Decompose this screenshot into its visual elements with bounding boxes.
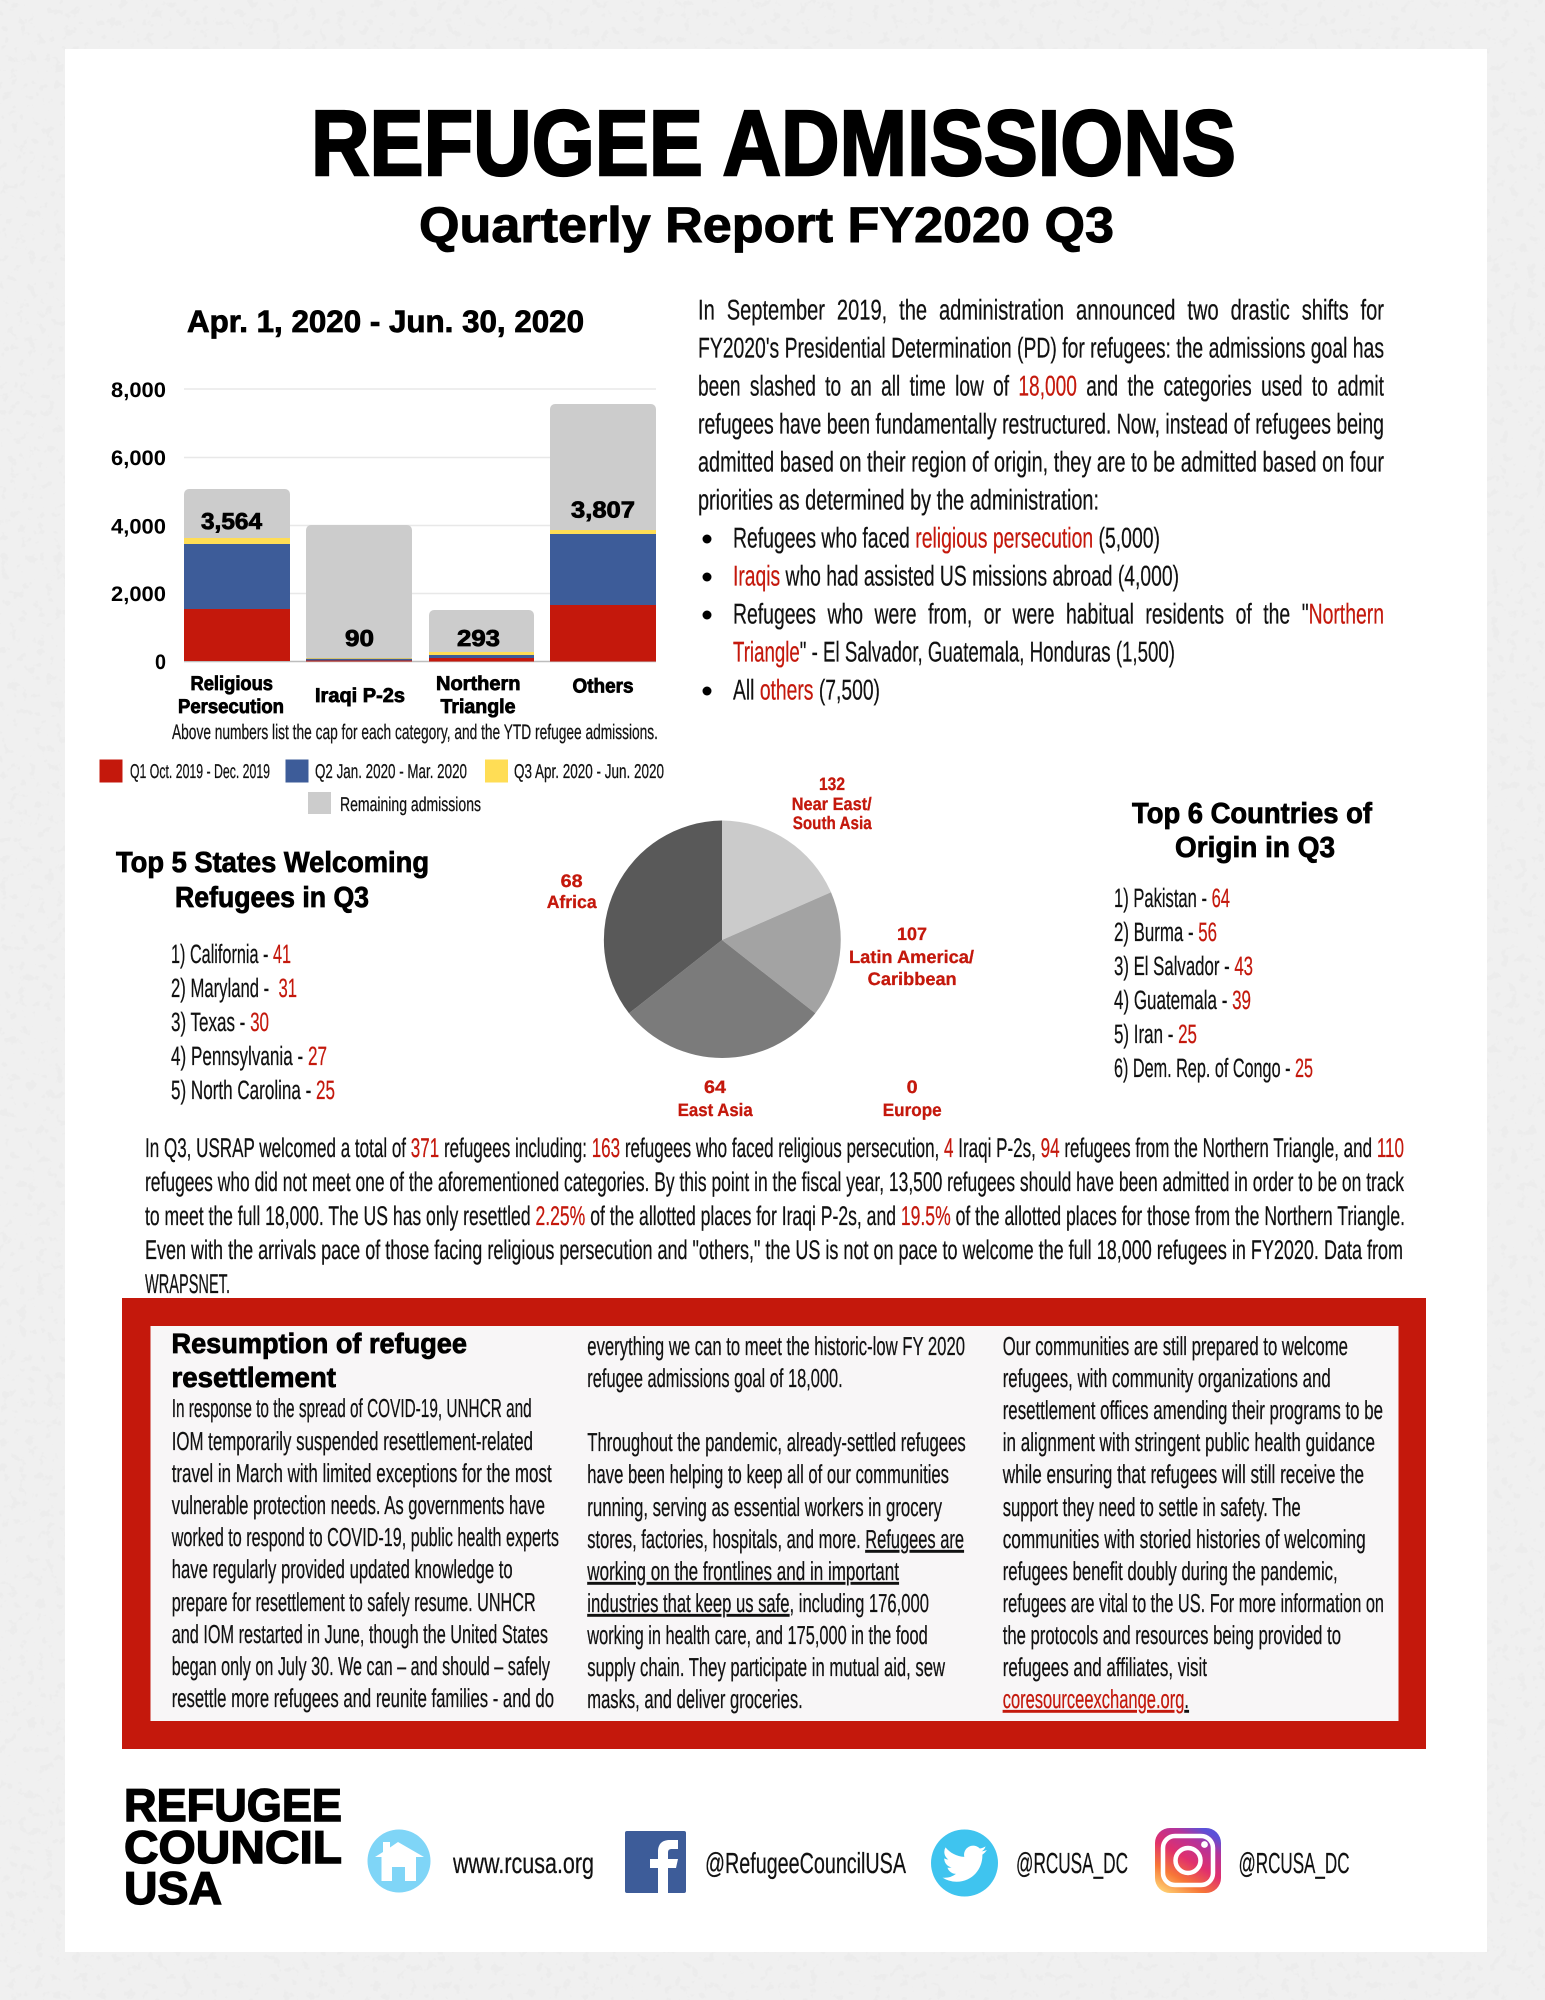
panel column 2: Throughout the pandemic, already-settled refugees — [587, 1427, 966, 1457]
intro text block: priorities as determined by the administration: — [698, 484, 1099, 516]
y axis labels — [111, 379, 166, 674]
bullet list of priorities — [702, 522, 1384, 706]
heading: top 6 countries: Top 6 Countries of — [1132, 798, 1372, 830]
x axis labels: Iraqi P-2s — [315, 685, 405, 707]
pie label: Near East/South Asia: 132 — [819, 774, 845, 794]
panel column 1: began only on July 30. We can – and should – safely — [172, 1651, 550, 1681]
heading: top 5 states: Refugees in Q3 — [175, 882, 369, 914]
panel column 1: have regularly provided updated knowledge to — [172, 1554, 513, 1584]
heading: top 6 countries — [1132, 798, 1372, 864]
chart heading: Apr. 1, 2020 - Jun. 30, 2020 — [187, 304, 584, 339]
pie label: Europe — [883, 1077, 942, 1120]
bullet list of priorities: All others (7,500) — [733, 674, 880, 706]
pie label: Near East/South Asia: South Asia — [793, 813, 873, 833]
icon: website home — [368, 1830, 430, 1892]
icon: instagram — [1155, 1828, 1221, 1893]
subtitle: Quarterly Report FY2020 Q3 — [419, 197, 1114, 253]
x axis labels: Northern — [436, 673, 520, 695]
twitter handle: @RCUSA_DC — [1016, 1848, 1128, 1880]
panel column 3: refugees, with community organizations and — [1003, 1363, 1331, 1393]
pie chart: arrivals by region — [547, 774, 974, 1120]
pie label: Africa: Africa — [547, 892, 598, 912]
intro text block: been slashed to an all time low of 18,000 and the categories used to admit — [698, 370, 1384, 402]
x axis labels: Persecution — [178, 696, 284, 718]
summary paragraph: In Q3, USRAP welcomed a total of 371 refugees including: 163 refugees who faced religious persecution, 4 Iraqi P-2s, 94 refugees from the Northern Triangle, and 110 — [145, 1133, 1404, 1163]
bar: Others — [550, 404, 656, 662]
panel column 2 — [587, 1331, 966, 1714]
y axis labels: 0 — [155, 651, 166, 674]
y axis labels: 8,000 — [111, 379, 166, 402]
website text: www.rcusa.org — [452, 1848, 594, 1880]
heading: top 6 countries: Origin in Q3 — [1175, 832, 1335, 864]
panel column 1: In response to the spread of COVID-19, UNHCR and — [172, 1393, 532, 1423]
facebook handle: @RefugeeCouncilUSA — [705, 1848, 906, 1880]
panel column 1 — [171, 1393, 559, 1713]
list: top 6 countries: 1) Pakistan - 64 — [1114, 883, 1230, 913]
panel column 2: masks, and deliver groceries. — [587, 1684, 803, 1714]
pie label: Latin America/Caribbean: 107 — [897, 924, 927, 944]
panel column 1: travel in March with limited exceptions for the most — [172, 1458, 552, 1488]
panel column 1: prepare for resettlement to safely resume. UNHCR — [172, 1587, 536, 1617]
list: top 6 countries: 5) Iran - 25 — [1114, 1019, 1197, 1049]
list: top 5 states: 3) Texas - 30 — [171, 1007, 269, 1037]
panel column 2: working in health care, and 175,000 in the food — [587, 1620, 928, 1650]
x axis labels: Religious — [190, 673, 273, 695]
title: REFUGEE ADMISSIONS — [311, 91, 1236, 195]
panel column 3: refugees benefit doubly during the pandemic, — [1003, 1556, 1338, 1586]
icon: facebook — [625, 1831, 686, 1893]
instagram handle: @RCUSA_DC — [1238, 1848, 1350, 1880]
chart legend: Q2 Jan. 2020 - Mar. 2020 — [315, 761, 467, 783]
panel heading — [172, 1328, 467, 1393]
pie label: Near East/South Asia: Near East/ — [792, 794, 872, 814]
summary paragraph: WRAPSNET. — [145, 1269, 230, 1299]
panel column 2: industries that keep us safe, including 176,000 — [587, 1588, 929, 1618]
bar: Iraqi P-2s — [306, 525, 412, 662]
pie label: East Asia: 64 — [704, 1077, 726, 1097]
bar: Iraqi P-2s: 90 — [345, 625, 374, 651]
panel column 2: have been helping to keep all of our communities — [587, 1459, 949, 1489]
panel column 3: support they need to settle in safety. The — [1003, 1492, 1301, 1522]
panel column 1: resettle more refugees and reunite families - and do — [172, 1683, 554, 1713]
pie label: Near East/South Asia — [792, 774, 873, 833]
list: top 6 countries — [1114, 883, 1313, 1083]
pie label: Europe: Europe — [883, 1100, 942, 1120]
panel column 1: vulnerable protection needs. As governments have — [172, 1490, 545, 1520]
x axis labels — [178, 673, 634, 718]
pie label: Latin America/Caribbean: Latin America/ — [849, 947, 974, 967]
list: top 5 states: 2) Maryland - 31 — [171, 973, 297, 1003]
list: top 6 countries: 6) Dem. Rep. of Congo - 25 — [1114, 1053, 1313, 1083]
list: top 6 countries: 4) Guatemala - 39 — [1114, 985, 1251, 1015]
bar chart — [111, 379, 656, 718]
pie label: East Asia: East Asia — [678, 1100, 754, 1120]
panel column 2: running, serving as essential workers in grocery — [587, 1492, 942, 1522]
pie label: Europe: 0 — [907, 1077, 918, 1097]
panel column 3: refugees and affiliates, visit — [1003, 1652, 1207, 1682]
bar: Religious Persecution: 3,564 — [201, 508, 262, 534]
x axis labels: Triangle — [440, 696, 516, 718]
logo: Refugee Council USA: REFUGEE — [124, 1779, 342, 1831]
summary paragraph — [145, 1133, 1405, 1299]
list: top 6 countries: 2) Burma - 56 — [1114, 917, 1217, 947]
panel column 3: coresourceexchange.org. — [1003, 1684, 1189, 1714]
panel column 2: supply chain. They participate in mutual aid, sew — [587, 1652, 945, 1682]
bullet list of priorities: Refugees who faced religious persecution (5,000) — [733, 522, 1160, 554]
heading: top 5 states: Top 5 States Welcoming — [116, 847, 429, 879]
list: top 5 states: 1) California - 41 — [171, 939, 291, 969]
bar: Northern Triangle — [429, 610, 534, 662]
panel: resumption of refugee resettlement — [122, 1298, 1426, 1749]
panel column 1: worked to respond to COVID-19, public health experts — [171, 1522, 559, 1552]
panel column 3: while ensuring that refugees will still receive the — [1002, 1459, 1364, 1489]
bullet list of priorities: Triangle" - El Salvador, Guatemala, Honduras (1,500) — [733, 636, 1175, 668]
panel column 1: and IOM restarted in June, though the United States — [172, 1619, 548, 1649]
panel column 3: communities with storied histories of welcoming — [1003, 1524, 1366, 1554]
bar: Others: 3,807 — [571, 496, 635, 522]
list: top 5 states: 5) North Carolina - 25 — [171, 1075, 335, 1105]
panel column 3: the protocols and resources being provided to — [1003, 1620, 1341, 1650]
chart legend: Q1 Oct. 2019 - Dec. 2019 — [130, 761, 270, 783]
heading: top 5 states — [116, 847, 429, 914]
bar: Northern Triangle: 293 — [457, 625, 500, 651]
intro text block — [698, 294, 1384, 706]
logo: Refugee Council USA — [124, 1779, 342, 1914]
pie label: Africa — [547, 871, 598, 912]
panel column 1: IOM temporarily suspended resettlement-related — [172, 1426, 533, 1456]
chart legend: Remaining admissions — [340, 794, 481, 816]
y axis labels: 4,000 — [111, 516, 166, 538]
panel column 2: working on the frontlines and in important — [587, 1556, 900, 1586]
pie label: East Asia — [678, 1077, 754, 1120]
bullet list of priorities: Iraqis who had assisted US missions abroad (4,000) — [733, 560, 1179, 592]
logo: Refugee Council USA: COUNCIL — [124, 1821, 342, 1873]
panel column 3: Our communities are still prepared to welcome — [1003, 1331, 1348, 1361]
logo: Refugee Council USA: USA — [124, 1862, 222, 1914]
chart legend: Q3 Apr. 2020 - Jun. 2020 — [514, 761, 664, 783]
pie label: Africa: 68 — [561, 871, 583, 891]
chart note: Above numbers list the cap for each category, and the YTD refugee admissions. — [172, 721, 658, 744]
panel heading: Resumption of refugee — [172, 1328, 467, 1359]
list: top 6 countries: 3) El Salvador - 43 — [1114, 951, 1253, 981]
y axis labels: 6,000 — [111, 447, 166, 470]
list: top 5 states — [171, 939, 335, 1105]
panel column 3 — [1002, 1331, 1384, 1714]
pie label: Latin America/Caribbean: Caribbean — [868, 969, 957, 989]
x axis labels: Others — [572, 676, 634, 698]
list: top 5 states: 4) Pennsylvania - 27 — [171, 1041, 327, 1071]
panel column 2: refugee admissions goal of 18,000. — [587, 1363, 843, 1393]
chart legend — [100, 760, 664, 816]
pie label: Latin America/Caribbean — [849, 924, 974, 989]
bar: Religious Persecution — [184, 489, 290, 661]
panel column 2: stores, factories, hospitals, and more. Refugees are — [587, 1524, 964, 1554]
icon: twitter — [931, 1830, 998, 1896]
panel heading: resettlement — [172, 1362, 336, 1393]
y axis labels: 2,000 — [111, 583, 166, 606]
panel column 2: everything we can to meet the historic-low FY 2020 — [587, 1331, 965, 1361]
